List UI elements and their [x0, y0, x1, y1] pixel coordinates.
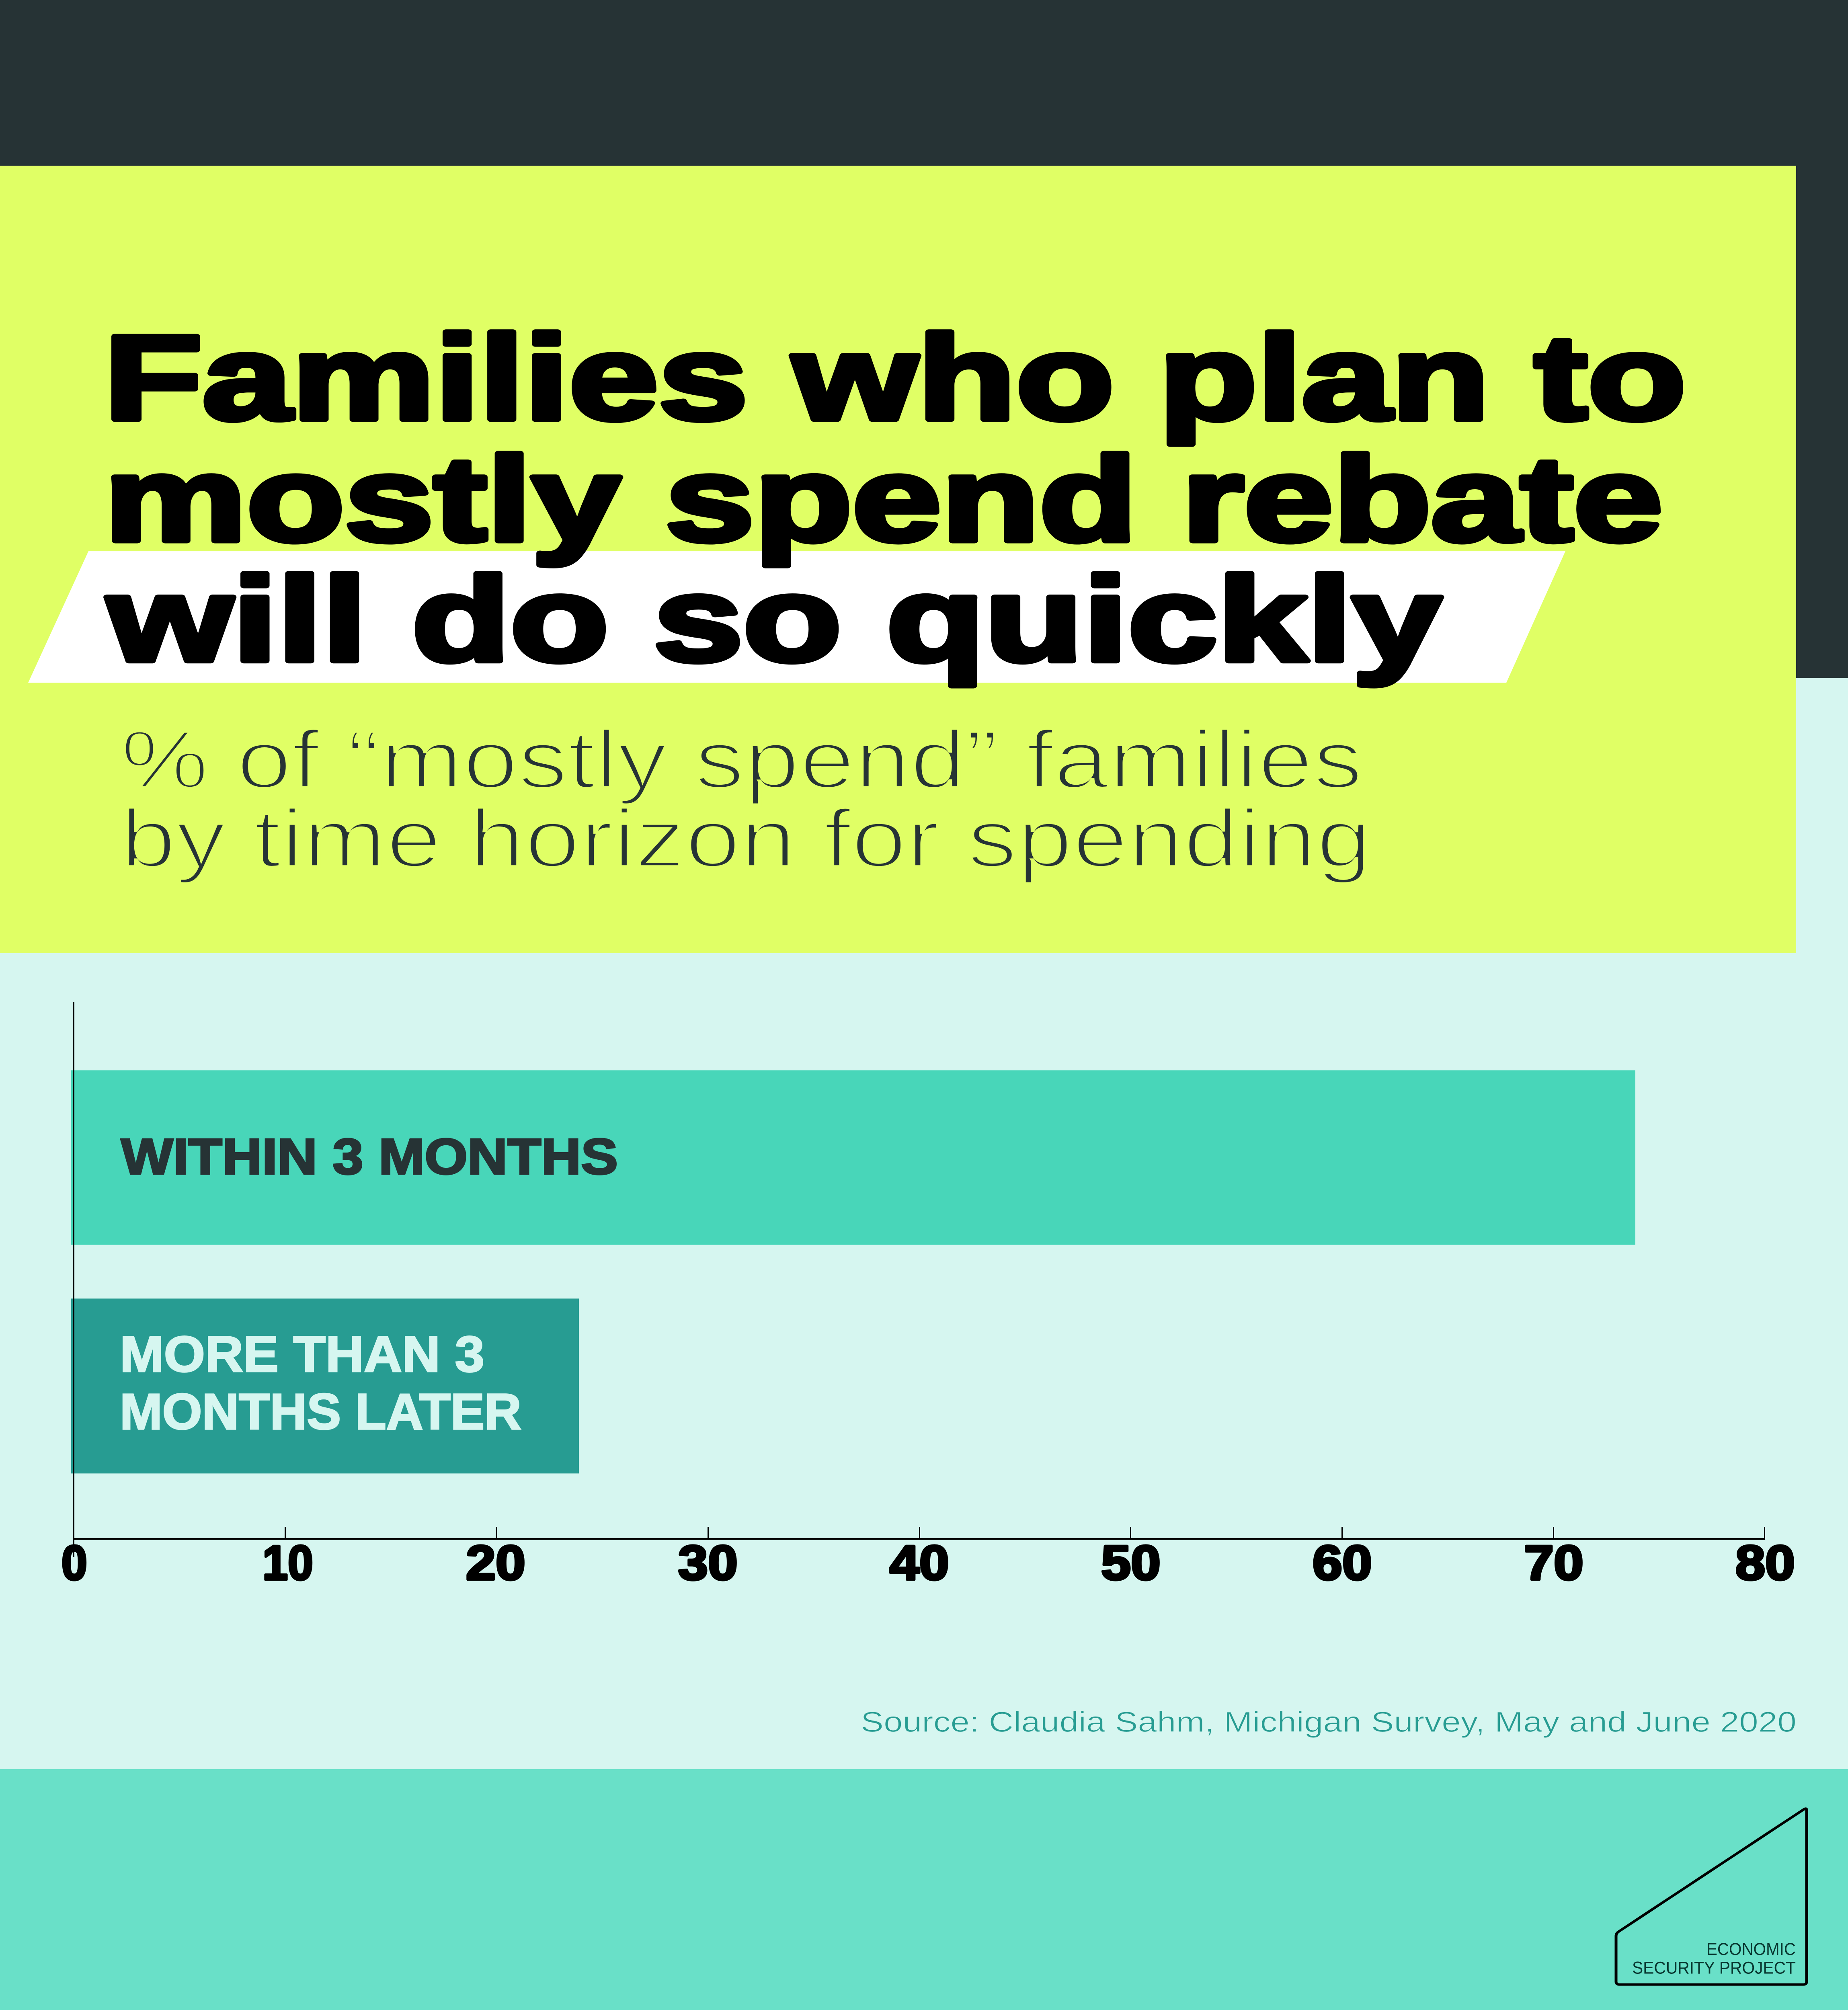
axis labels: 70	[1524, 1535, 1583, 1590]
source note: Source: Claudia Sahm, Michigan Survey, May and June 2020	[861, 1706, 1797, 1738]
vertical axis	[73, 1002, 74, 1557]
logo: Economic Security Project: ECONOMIC	[1706, 1939, 1796, 1959]
subtitle: % of “mostly spend” families	[121, 713, 1363, 805]
axis labels: 20	[466, 1535, 525, 1590]
title: Families who plan to	[104, 311, 1686, 445]
horizontal axis with ticks	[73, 1527, 1765, 1540]
subtitle	[121, 713, 1372, 884]
white highlight behind third title line	[28, 551, 1565, 683]
title: mostly spend rebate	[104, 432, 1663, 567]
bar: more than 3 months later: MORE THAN 3	[120, 1326, 484, 1382]
axis labels: 30	[678, 1535, 738, 1590]
title	[104, 311, 1686, 687]
dark top band	[0, 0, 1848, 678]
panel: lime header	[0, 166, 1796, 953]
logo: Economic Security Project: SECURITY PROJECT	[1632, 1958, 1796, 1977]
axis labels: 80	[1735, 1535, 1795, 1590]
axis labels: 40	[890, 1535, 949, 1590]
subtitle: by time horizon for spending	[121, 792, 1372, 884]
bar: within 3 months	[71, 1070, 1635, 1245]
title: will do so quickly	[105, 552, 1443, 687]
axis labels: 0	[62, 1535, 87, 1590]
bar: more than 3 months later: MONTHS LATER	[120, 1383, 521, 1440]
footer band	[0, 1769, 1848, 2010]
bar chart	[62, 1002, 1795, 1590]
axis labels: 60	[1313, 1535, 1372, 1590]
bar: more than 3 months later	[71, 1298, 579, 1473]
axis labels: 50	[1101, 1535, 1161, 1590]
axis labels	[62, 1535, 1795, 1590]
logo: Economic Security Project	[1616, 1809, 1807, 1985]
axis labels: 10	[263, 1535, 313, 1590]
bar: within 3 months: WITHIN 3 MONTHS	[121, 1128, 618, 1185]
